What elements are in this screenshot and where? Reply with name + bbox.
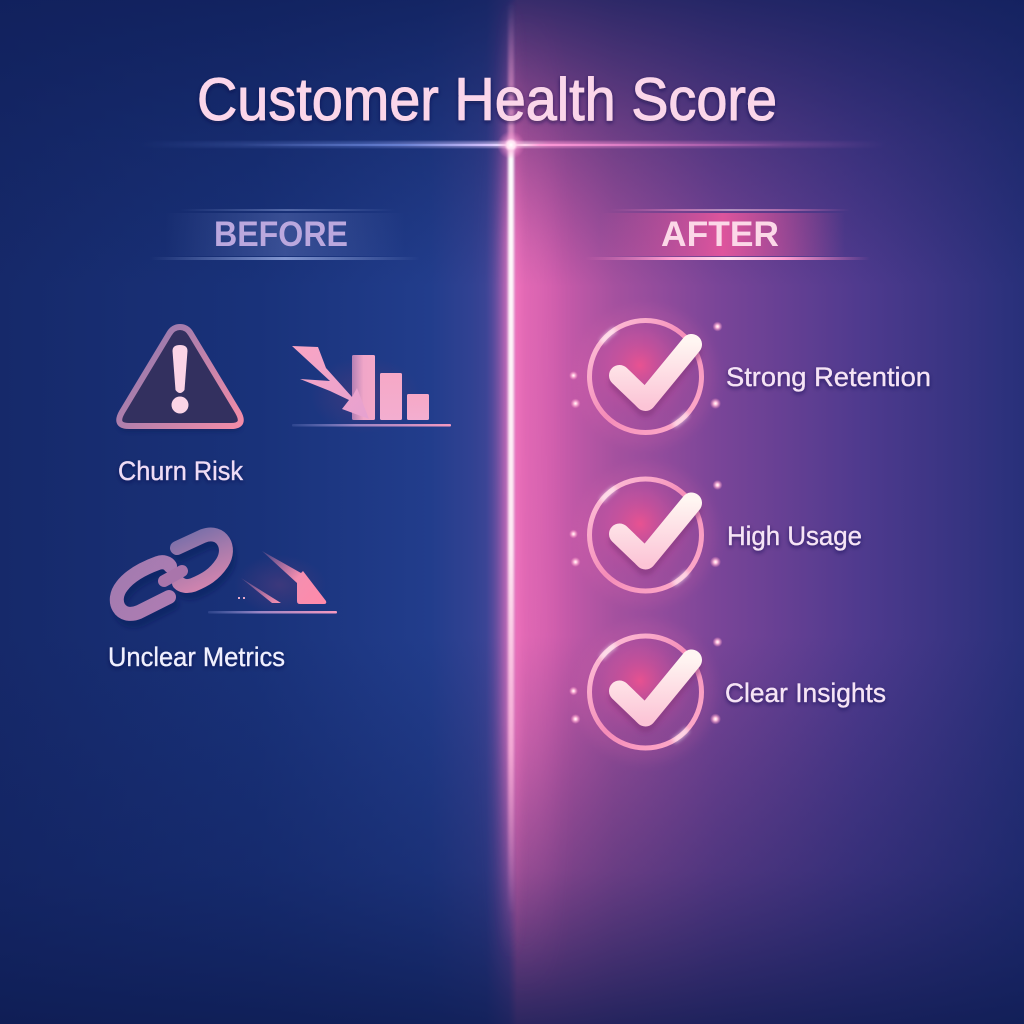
label: unclear metrics: Unclear Metrics — [108, 642, 285, 672]
icon: falling arrow — [208, 551, 337, 615]
icon: broken chain link — [117, 535, 229, 621]
label: clear insights: Clear Insights — [725, 678, 886, 708]
panel: before — [108, 209, 451, 672]
after heading banner: AFTER — [661, 215, 779, 254]
icon: warning triangle — [119, 327, 241, 431]
before heading banner: BEFORE — [214, 215, 348, 254]
icon: check clear insights — [569, 622, 722, 762]
icon: falling bar chart — [292, 346, 451, 433]
horizontal title rule with flare — [140, 131, 885, 159]
label: high usage: High Usage — [727, 521, 862, 551]
icon: check high usage — [569, 465, 722, 605]
icon: check strong retention — [569, 306, 722, 446]
panel: after — [569, 209, 931, 762]
after heading banner — [585, 209, 870, 260]
title: Customer Health Score — [197, 66, 777, 133]
glowing center divider — [505, 0, 545, 1000]
before heading banner — [150, 209, 420, 260]
label: strong retention: Strong Retention — [726, 362, 931, 392]
label: churn risk: Churn Risk — [118, 456, 243, 486]
